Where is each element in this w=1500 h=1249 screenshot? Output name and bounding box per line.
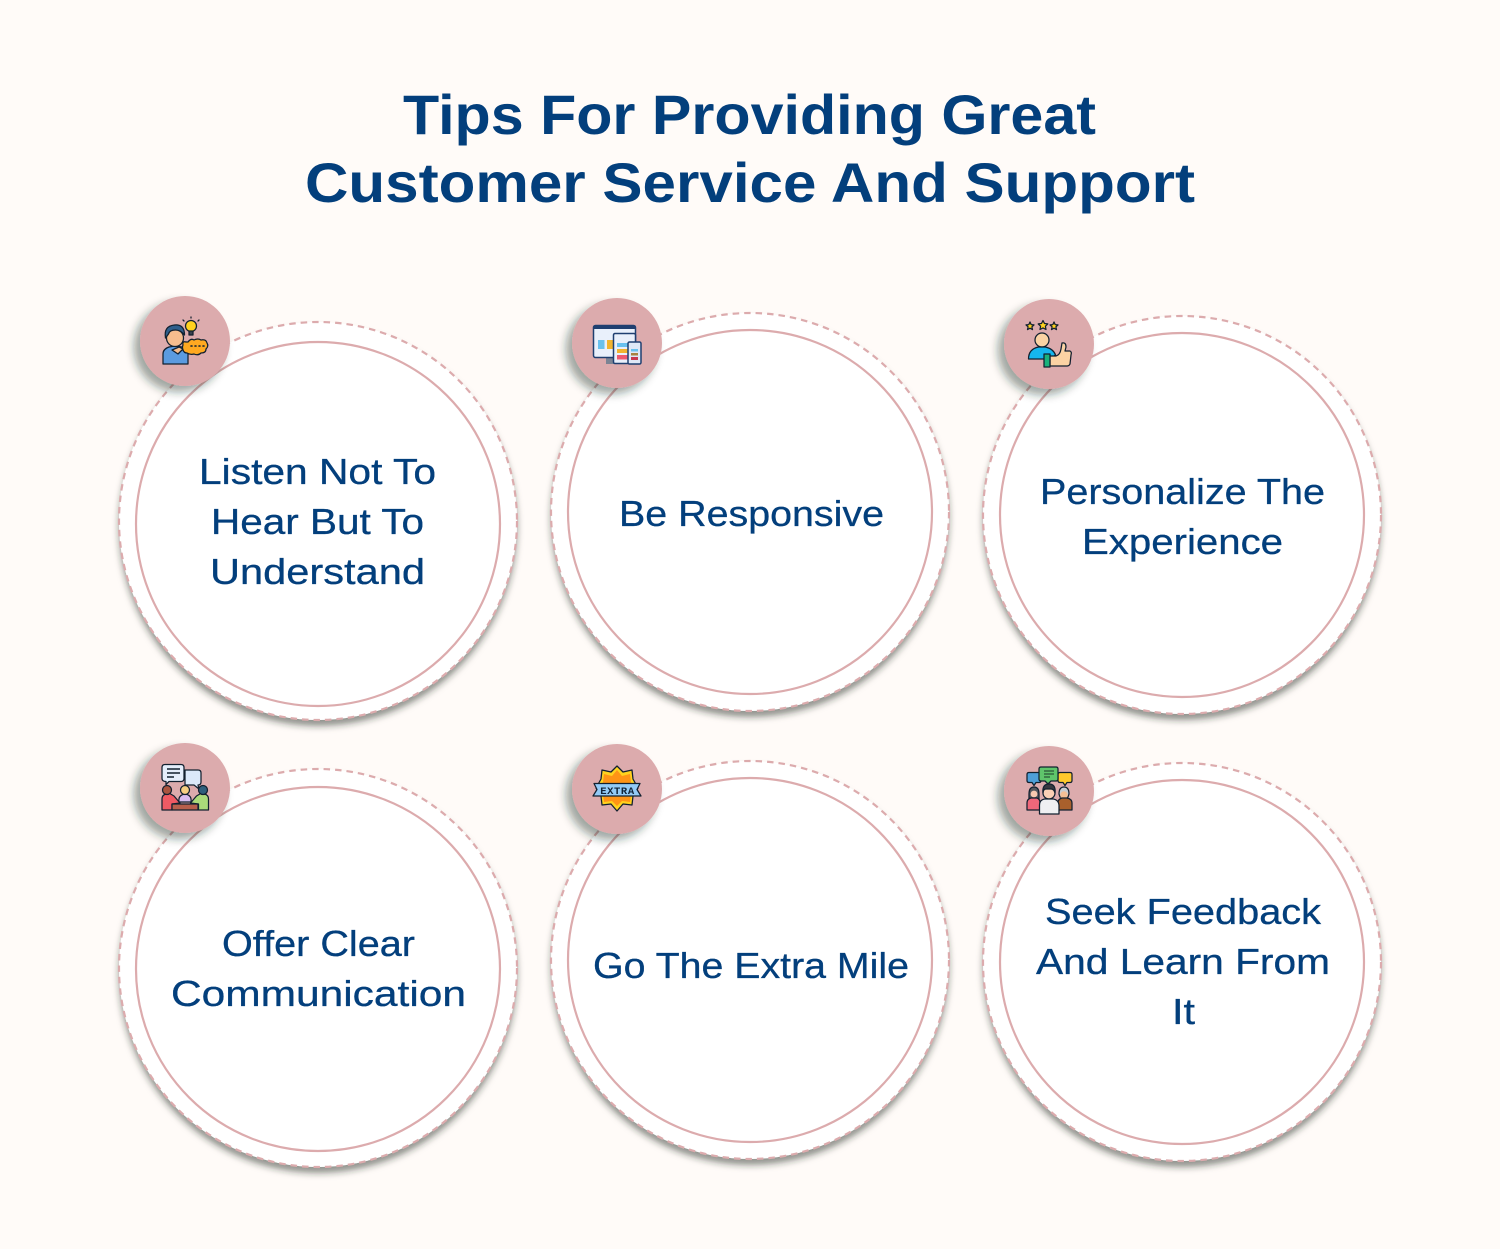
panel: seek feedback and learn from it: [983, 746, 1381, 1161]
panel: offer clear communication: [119, 743, 517, 1167]
text: listen not to hear but to understand: Understand: [210, 551, 425, 592]
text: offer clear communication: [171, 923, 466, 1014]
text: go the extra mile: Go The Extra Mile: [593, 945, 909, 986]
text: personalize the experience: [1040, 471, 1325, 562]
icon badge: extra star: [572, 744, 662, 834]
panel: listen not to hear but to understand: [119, 296, 517, 720]
text: seek feedback and learn from it: [1036, 891, 1330, 1032]
title: Tips For Providing Great: [403, 83, 1096, 146]
text: offer clear communication: Communication: [171, 973, 466, 1014]
text: listen not to hear but to understand: [199, 451, 436, 592]
text: personalize the experience: Experience: [1082, 521, 1283, 562]
panel: go the extra mile: [551, 744, 949, 1159]
icon badge: extra star: EXTRA: [600, 786, 635, 798]
icon badge: people sharing feedback: [1004, 746, 1094, 836]
text: be responsive: Be Responsive: [619, 493, 884, 534]
text: offer clear communication: Offer Clear: [222, 923, 415, 964]
text: personalize the experience: Personalize The: [1040, 471, 1325, 512]
icon badge: team conversation: [140, 743, 230, 833]
text: seek feedback and learn from it: Seek Feedback: [1045, 891, 1322, 932]
icon badge: thinking person with light bulb: [140, 296, 230, 386]
panel: personalize the experience: [983, 299, 1381, 714]
text: listen not to hear but to understand: Hear But To: [211, 501, 424, 542]
title: Customer Service And Support: [305, 151, 1195, 214]
title: [305, 83, 1195, 214]
text: seek feedback and learn from it: It: [1172, 991, 1195, 1032]
icon badge: rated thumbs up: [1004, 299, 1094, 389]
panel: be responsive: [551, 298, 949, 711]
icon badge: responsive screens: [572, 298, 662, 388]
text: seek feedback and learn from it: And Learn From: [1036, 941, 1330, 982]
text: listen not to hear but to understand: Listen Not To: [199, 451, 436, 492]
